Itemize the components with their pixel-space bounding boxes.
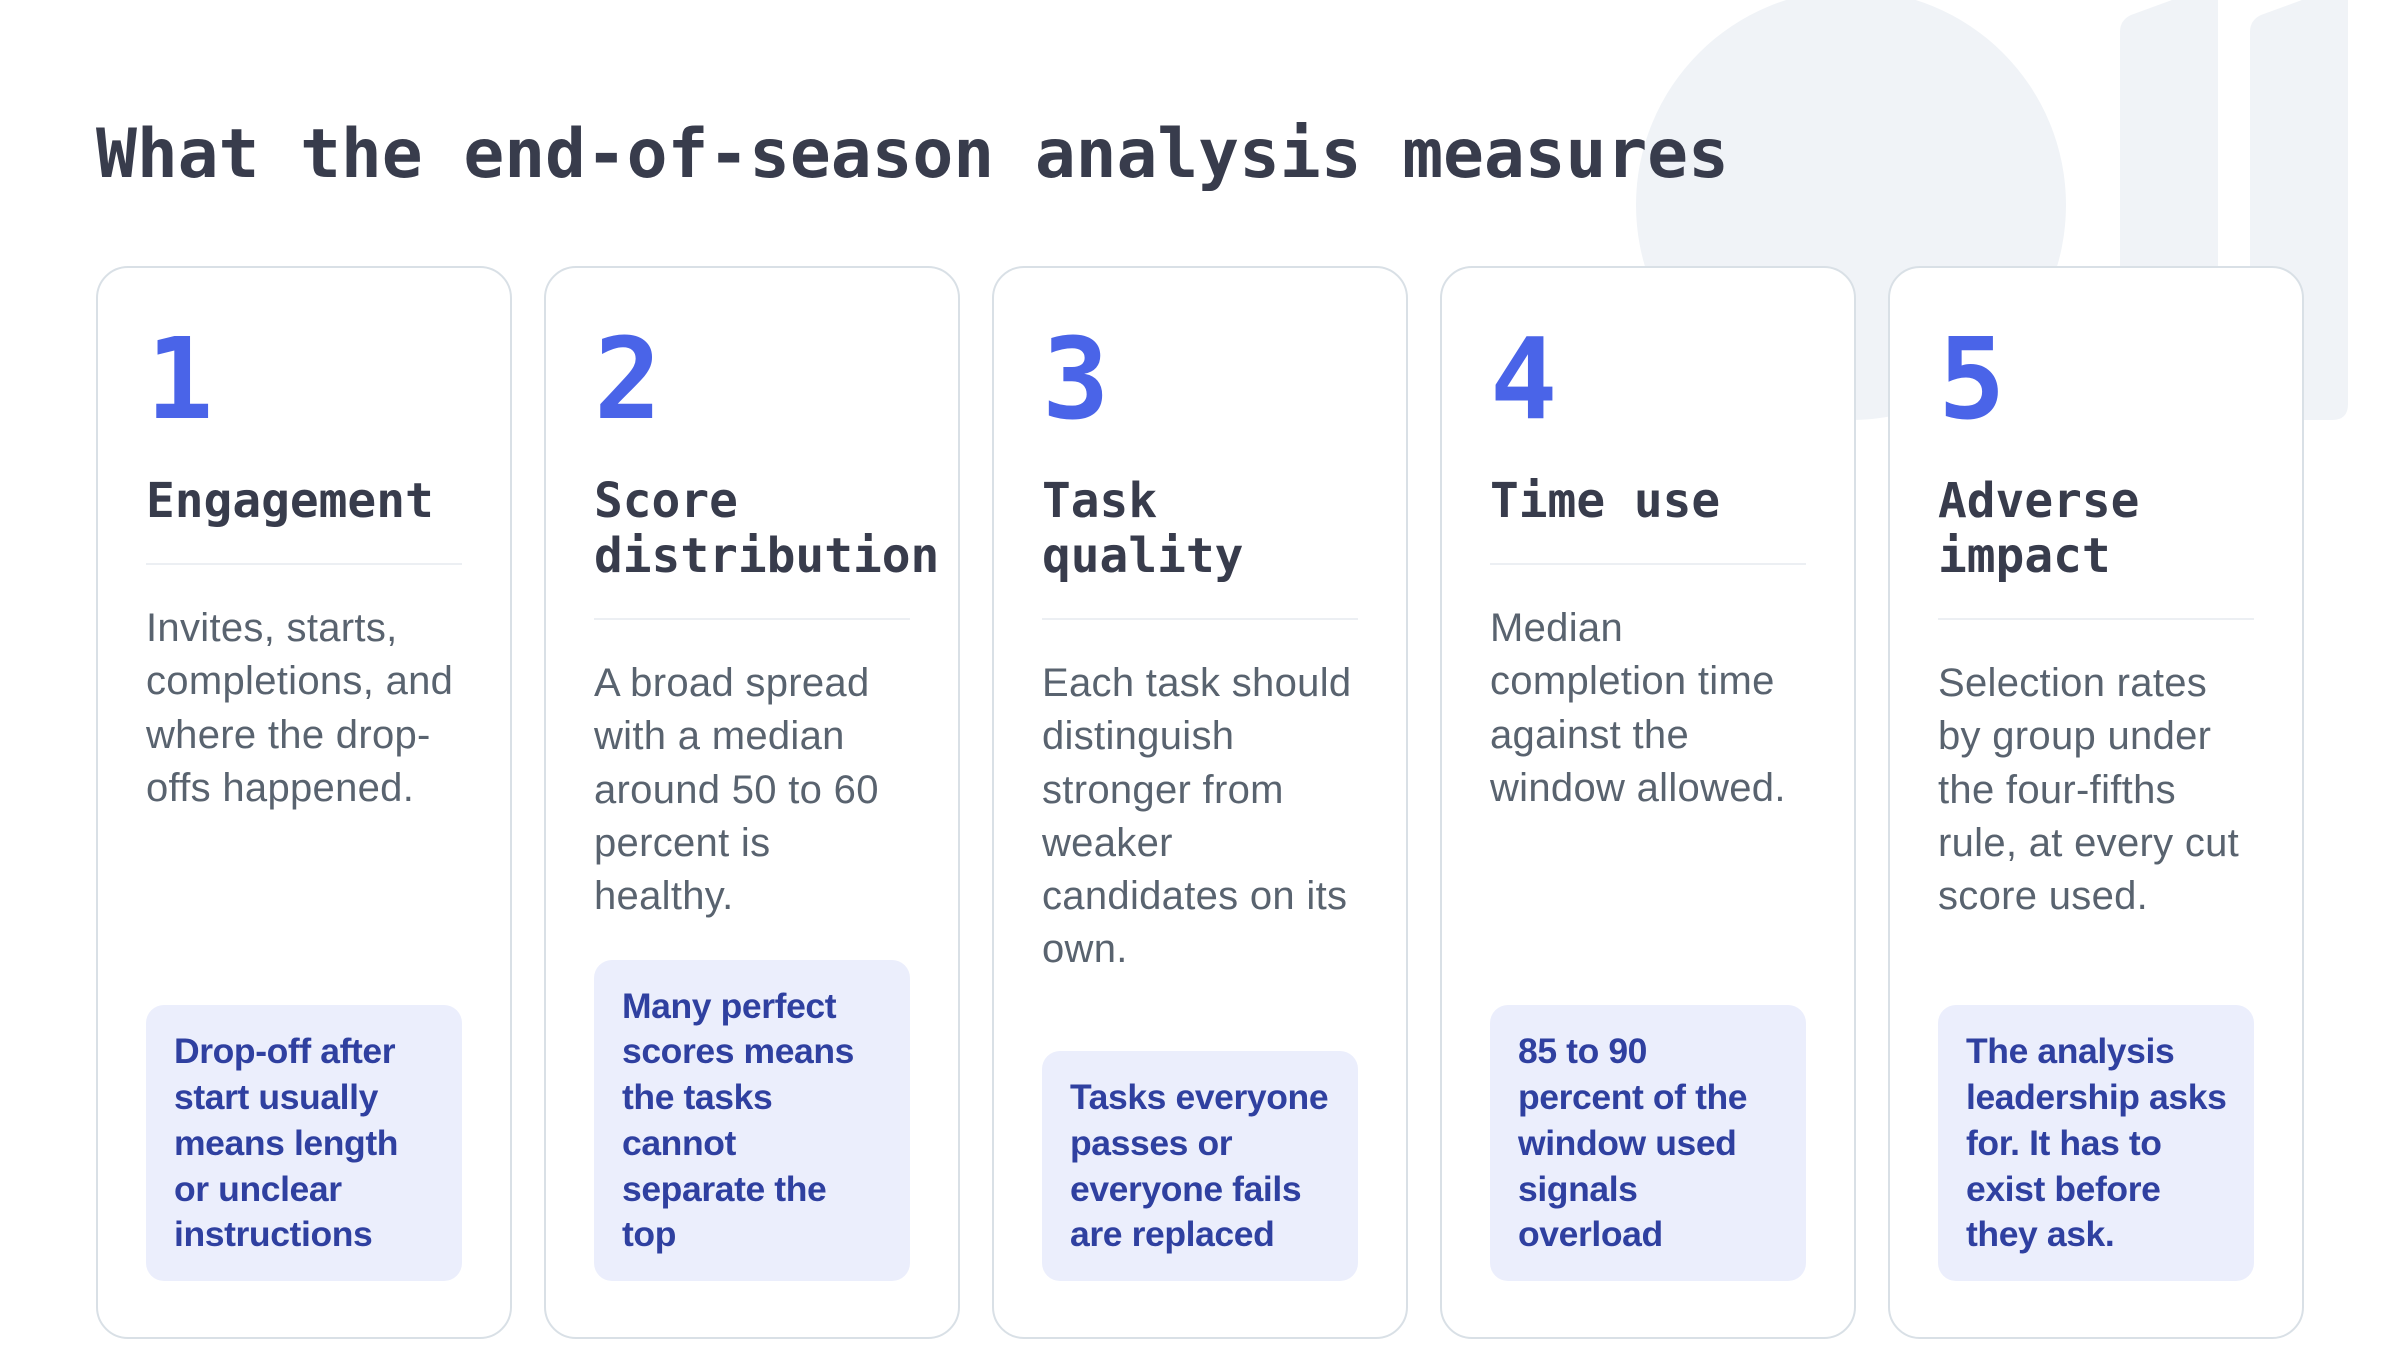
- callout: window used: [1518, 1123, 1736, 1163]
- description: [146, 606, 453, 810]
- callout: top: [622, 1214, 676, 1254]
- title: What the end-of-season analysis measures: [96, 115, 1729, 194]
- heading: impact: [1938, 529, 2111, 584]
- description: stronger from: [1042, 768, 1284, 812]
- description: Selection rates: [1938, 661, 2207, 705]
- heading: Task: [1042, 474, 1157, 529]
- description: where the drop-: [146, 713, 431, 757]
- number 4: 4: [1490, 315, 1557, 445]
- heading: [1042, 474, 1243, 584]
- callout: percent of the: [1518, 1077, 1747, 1117]
- panel: task quality: [992, 266, 1408, 1339]
- description: [1490, 606, 1786, 810]
- heading: Engagement: [146, 474, 434, 529]
- callout: 85 to 90: [1518, 1031, 1647, 1071]
- callout: signals: [1518, 1169, 1638, 1209]
- description: with a median: [594, 714, 845, 758]
- callout: passes or: [1070, 1123, 1232, 1163]
- callout: separate the: [622, 1169, 826, 1209]
- description: percent is: [594, 821, 770, 865]
- heading: Adverse: [1938, 474, 2139, 529]
- description: score used.: [1938, 874, 2148, 918]
- description: around 50 to 60: [594, 768, 879, 812]
- number 2: 2: [594, 315, 661, 445]
- description: own.: [1042, 927, 1128, 971]
- heading: [594, 474, 939, 584]
- description: distinguish: [1042, 714, 1234, 758]
- callout: leadership asks: [1966, 1077, 2226, 1117]
- callout: Drop-off after: [174, 1031, 395, 1071]
- callout: [1938, 1005, 2254, 1281]
- callout: are replaced: [1070, 1214, 1274, 1254]
- callout: [1042, 1051, 1358, 1281]
- description: completion time: [1490, 659, 1775, 703]
- description: weaker: [1042, 821, 1173, 865]
- panel: score distribution: [544, 266, 960, 1339]
- heading: Time use: [1490, 474, 1720, 529]
- description: candidates on its: [1042, 874, 1347, 918]
- description: completions, and: [146, 659, 453, 703]
- description: healthy.: [594, 874, 734, 918]
- description: A broad spread: [594, 661, 870, 705]
- description: window allowed.: [1490, 766, 1786, 810]
- heading: distribution: [594, 529, 939, 584]
- callout: scores means: [622, 1031, 854, 1071]
- heading: quality: [1042, 529, 1243, 584]
- description: [1042, 661, 1351, 971]
- description: Each task should: [1042, 661, 1351, 705]
- callout: The analysis: [1966, 1031, 2174, 1071]
- callout: they ask.: [1966, 1214, 2114, 1254]
- heading: [1938, 474, 2139, 584]
- callout: overload: [1518, 1214, 1663, 1254]
- callout: Tasks everyone: [1070, 1077, 1328, 1117]
- description: [594, 661, 879, 918]
- callout: everyone fails: [1070, 1169, 1301, 1209]
- panel: time use: [1440, 266, 1856, 1339]
- description: [1938, 661, 2239, 918]
- callout: Many perfect: [622, 986, 836, 1026]
- description: Median: [1490, 606, 1623, 650]
- callout: exist before: [1966, 1169, 2160, 1209]
- callout: start usually: [174, 1077, 378, 1117]
- number 5: 5: [1938, 315, 2005, 445]
- description: by group under: [1938, 714, 2211, 758]
- callout: [146, 1005, 462, 1281]
- description: against the: [1490, 713, 1689, 757]
- panel: engagement: [96, 266, 512, 1339]
- description: rule, at every cut: [1938, 821, 2239, 865]
- callout: cannot: [622, 1123, 736, 1163]
- number 1: 1: [146, 315, 213, 445]
- panel: adverse impact: [1888, 266, 2304, 1339]
- callout: or unclear: [174, 1169, 342, 1209]
- callout: for. It has to: [1966, 1123, 2162, 1163]
- description: the four-fifths: [1938, 768, 2176, 812]
- heading: Score: [594, 474, 738, 529]
- callout: instructions: [174, 1214, 372, 1254]
- callout: [594, 960, 910, 1281]
- callout: the tasks: [622, 1077, 772, 1117]
- callout: means length: [174, 1123, 398, 1163]
- callout: [1490, 1005, 1806, 1281]
- description: offs happened.: [146, 766, 414, 810]
- description: Invites, starts,: [146, 606, 398, 650]
- number 3: 3: [1042, 315, 1109, 445]
